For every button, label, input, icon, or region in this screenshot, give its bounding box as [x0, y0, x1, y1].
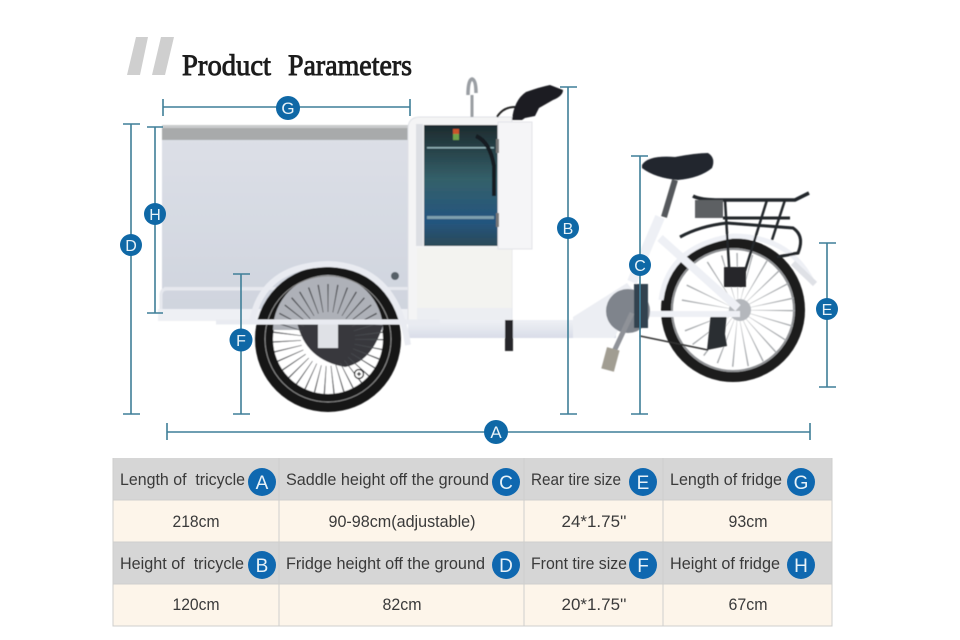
row 2 values: 67cm	[728, 595, 768, 614]
dimension H: H	[149, 207, 161, 224]
dimension B	[557, 87, 579, 414]
dimension F: F	[236, 333, 246, 350]
row 1 headers: Length of fridge	[670, 470, 782, 489]
row 1 values: 218cm	[172, 512, 220, 531]
seat post and saddle	[642, 153, 713, 217]
dimension A: A	[490, 423, 502, 442]
row 1 headers: A	[256, 473, 269, 494]
title: Product	[182, 49, 272, 82]
row 2 headers	[120, 551, 815, 579]
dimension G	[163, 96, 410, 120]
dimension C: C	[634, 258, 646, 275]
dimension G: G	[281, 99, 295, 118]
row 2 headers: H	[794, 556, 808, 577]
front fender and rail	[216, 264, 440, 345]
magnifier cursor	[354, 370, 364, 378]
row 1 headers: C	[499, 473, 513, 494]
row 1 headers: G	[794, 473, 808, 494]
row 1 headers	[120, 468, 815, 496]
faucet	[468, 79, 476, 117]
rear rack and battery	[680, 193, 809, 287]
title	[182, 49, 412, 82]
dimension C	[629, 156, 651, 414]
row 2 values: 120cm	[172, 595, 220, 614]
dimension D	[120, 124, 142, 414]
row 2 values	[172, 595, 768, 614]
row 2 headers: B	[256, 556, 268, 577]
row 2 headers: Height of fridge	[670, 554, 780, 573]
dimension D: D	[125, 238, 137, 255]
row 2 values: 82cm	[382, 595, 422, 614]
row 1 headers: Length of tricycle	[120, 470, 245, 489]
row 2 headers: F	[637, 556, 649, 577]
fridge body	[158, 125, 412, 321]
parameter table	[113, 458, 832, 626]
title: Parameters	[288, 49, 412, 82]
main beam	[408, 283, 638, 351]
motor and crank	[601, 284, 708, 372]
row 1 headers: Saddle height off the ground	[286, 470, 489, 489]
row 2 values: 20*1.75''	[562, 595, 626, 614]
row 1 headers: Rear tire size	[531, 470, 621, 489]
rear wheel	[666, 243, 800, 377]
row 1 headers: E	[637, 473, 649, 494]
row 2 headers: Front tire size	[531, 554, 627, 573]
title icon: grey slashes	[127, 37, 174, 75]
row 1 values: 90-98cm(adjustable)	[328, 512, 476, 531]
row 2 headers: Height of tricycle	[120, 554, 244, 573]
row 2 headers: Fridge height off the ground	[286, 554, 485, 573]
dimension B: B	[563, 221, 573, 238]
cabinet with window	[408, 117, 532, 320]
dimension E: E	[822, 302, 832, 319]
row 1 values: 93cm	[728, 512, 768, 531]
row 1 values: 24*1.75''	[562, 512, 626, 531]
handlebar	[497, 85, 563, 120]
tricycle illustration	[158, 79, 815, 403]
dimension A	[167, 420, 810, 444]
dimension E	[816, 243, 838, 387]
front wheel	[264, 275, 392, 403]
row 1 values	[172, 512, 768, 531]
dimension F	[230, 274, 252, 414]
row 2 headers: D	[499, 556, 513, 577]
bicycle frame	[632, 217, 815, 314]
dimension H	[144, 127, 166, 313]
